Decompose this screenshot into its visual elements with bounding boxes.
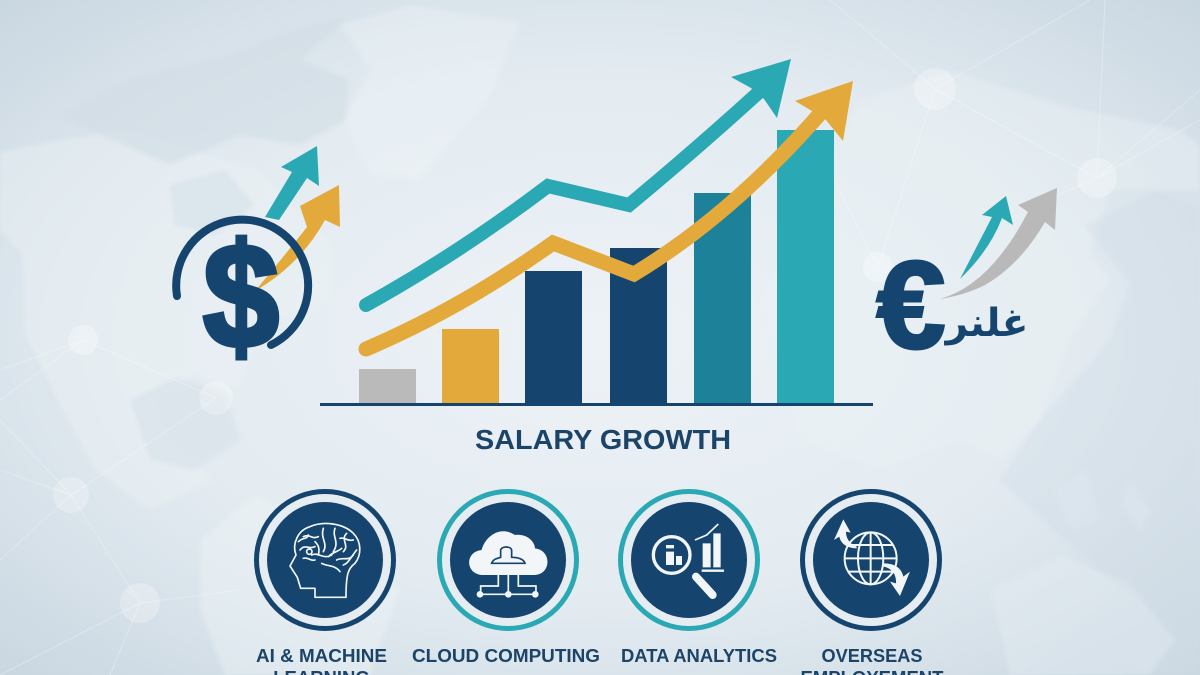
label: OVERSEAS <box>822 645 922 666</box>
map: gulf <box>130 378 240 470</box>
panel: cloud computing <box>412 492 600 666</box>
bar 3 <box>525 271 582 404</box>
bar 2 <box>442 329 499 404</box>
dollar ring <box>176 220 308 345</box>
map: south america <box>200 495 400 675</box>
icon: dollar with growth arrows <box>176 146 340 379</box>
map: europe and asia <box>760 70 1200 470</box>
currency text: غلنر <box>944 301 1028 346</box>
badge <box>256 492 394 628</box>
map: southeast asia islands <box>1055 470 1150 530</box>
teal arrow <box>960 196 1013 279</box>
badge <box>620 492 758 628</box>
label: CLOUD COMPUTING <box>412 645 600 666</box>
bar chart <box>320 130 873 406</box>
arrow: teal growth line <box>366 59 791 305</box>
map: hudson bay <box>170 170 255 235</box>
panel: AI and machine learning <box>256 492 394 675</box>
badge <box>802 492 940 628</box>
icon: brain and head <box>290 523 360 597</box>
arrow: gold growth line <box>366 81 853 349</box>
icon: cloud <box>469 531 547 598</box>
bar 5 <box>694 193 751 404</box>
euro sign: € <box>877 237 945 375</box>
dollar sign: $ <box>203 214 279 379</box>
title: SALARY GROWTH <box>475 424 731 455</box>
panel: overseas employment <box>800 492 944 675</box>
bar 1 <box>359 369 416 404</box>
gold arrow <box>255 185 340 291</box>
grey arrow <box>940 188 1057 299</box>
network nodes <box>53 68 1117 623</box>
axis <box>320 403 873 406</box>
label: DATA ANALYTICS <box>621 645 777 666</box>
teal arrow <box>265 146 319 220</box>
badge <box>440 492 576 628</box>
map: arctic islands <box>60 15 350 165</box>
icon: globe and arrows <box>834 519 910 596</box>
map: north america <box>0 130 330 510</box>
label: AI & MACHINE <box>256 645 387 666</box>
icon: magnifier and chart <box>653 524 724 595</box>
panel: data analytics <box>620 492 777 666</box>
bar 6 <box>777 130 834 404</box>
map: greenland <box>340 5 520 180</box>
bar 4 <box>610 248 667 404</box>
icon: euro with growth arrows <box>877 188 1057 375</box>
map: australia <box>990 555 1175 675</box>
map: east asia coast <box>1000 190 1200 675</box>
